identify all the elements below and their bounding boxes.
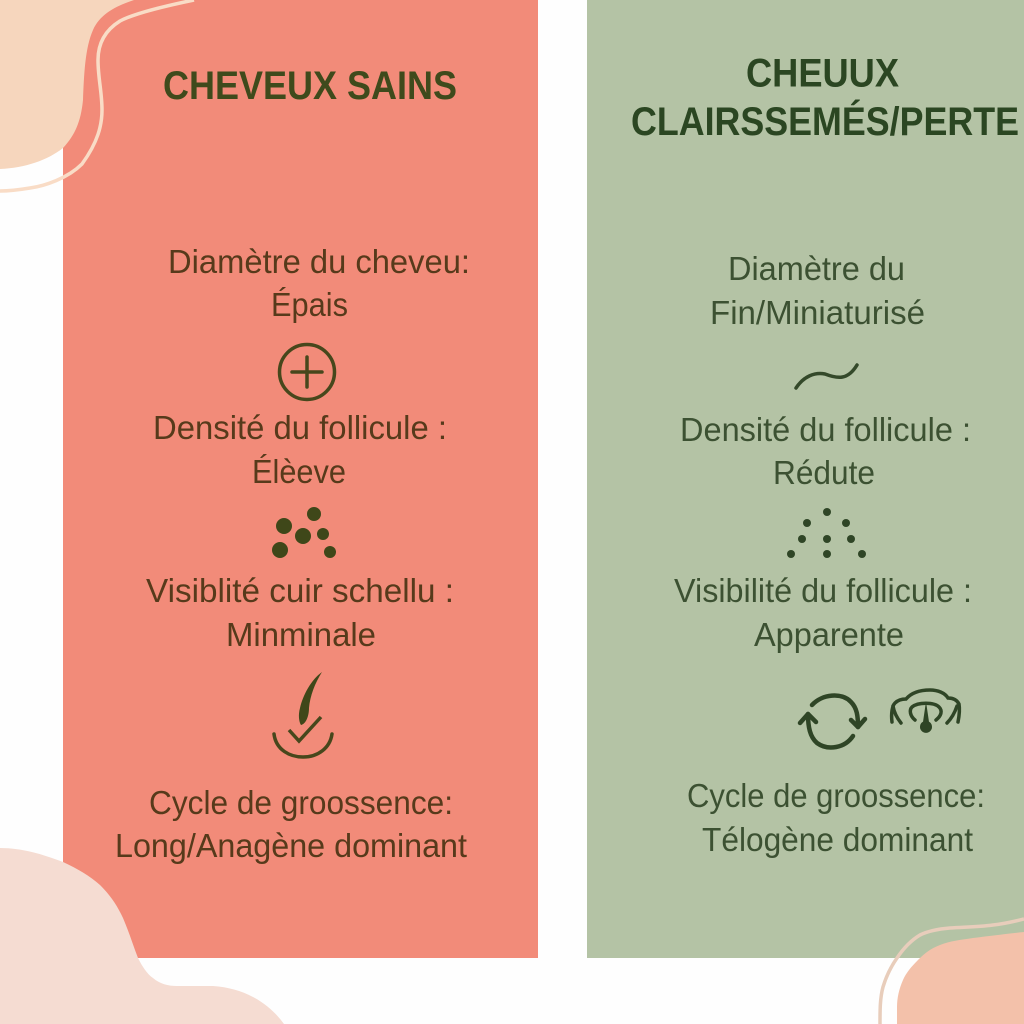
text: hair diameter, thinning: Diamètre du xyxy=(728,251,905,288)
decorative blob: bottom right xyxy=(897,932,1024,1024)
text: follicle visibility, thinning: Apparente xyxy=(754,617,904,654)
text: hair diameter, healthy xyxy=(168,244,470,324)
heading: healthy hair: CHEVEUX SAINS xyxy=(163,64,457,108)
text: follicle visibility, thinning xyxy=(674,573,972,654)
icon: plus in circle xyxy=(280,344,334,400)
text: growth cycle, thinning: Cycle de groossence: xyxy=(687,778,985,815)
text: growth cycle, thinning: Télogène dominant xyxy=(702,822,974,859)
decorative curve: bottom right xyxy=(880,919,1024,1024)
text: follicle visibility, thinning: Visibilité du follicule : xyxy=(674,573,972,610)
text: scalp visibility, healthy: Visiblité cuir schellu : xyxy=(146,573,454,610)
text: scalp visibility, healthy xyxy=(146,573,454,654)
text: follicle density, healthy xyxy=(153,410,447,491)
icon: follicle gauge xyxy=(892,690,959,732)
text: follicle density, thinning: Densité du follicule : xyxy=(680,412,971,449)
text: growth cycle, healthy: Long/Anagène dominant xyxy=(115,828,468,865)
decorative blob: bottom left xyxy=(0,848,284,1024)
icon: dense dots xyxy=(272,507,336,558)
text: follicle density, healthy: Densité du follicule : xyxy=(153,410,447,447)
panel: thinning hair background xyxy=(587,0,1024,958)
icon: sparse dots xyxy=(787,508,866,558)
text: hair diameter, healthy: Diamètre du cheveu: xyxy=(168,244,470,281)
icon: hair strand with check xyxy=(274,672,332,757)
text: growth cycle, thinning xyxy=(687,778,985,859)
text: hair diameter, healthy: Épais xyxy=(271,287,348,324)
heading: thinning hair xyxy=(631,52,1019,144)
heading: thinning hair: CHEUUX xyxy=(746,52,899,96)
text: follicle density, thinning: Rédute xyxy=(773,455,875,492)
text: growth cycle, healthy xyxy=(115,785,468,865)
text: follicle density, thinning xyxy=(680,412,971,492)
icon: cycle arrows xyxy=(800,696,865,747)
panel: healthy hair background xyxy=(63,0,538,958)
icon: thin wavy strand xyxy=(796,365,857,388)
text: hair diameter, thinning xyxy=(710,251,925,332)
text: scalp visibility, healthy: Minminale xyxy=(226,617,376,654)
decorative curve: top left xyxy=(0,0,194,191)
text: hair diameter, thinning: Fin/Miniaturisé xyxy=(710,295,925,332)
text: follicle density, healthy: Élèeve xyxy=(252,454,346,491)
text: growth cycle, healthy: Cycle de groossence: xyxy=(149,785,453,822)
decorative blob: top left xyxy=(0,0,134,169)
